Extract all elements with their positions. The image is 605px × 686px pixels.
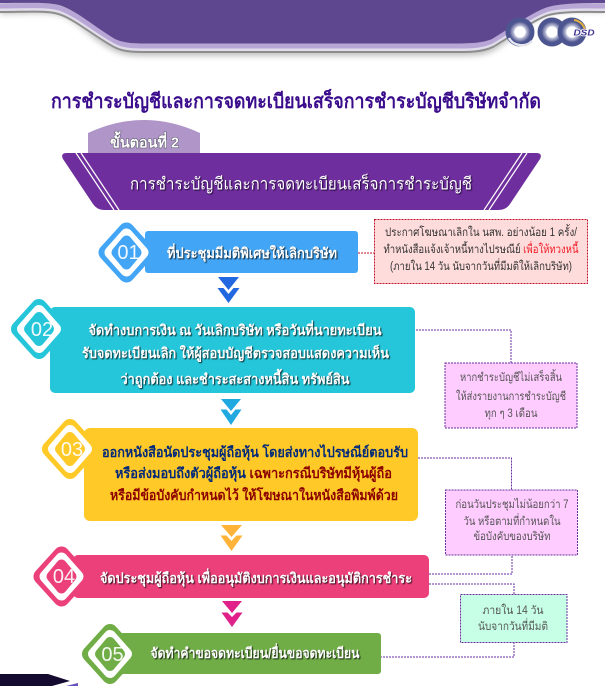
step 5 badge: 05	[101, 644, 124, 666]
banner: การชำระบัญชีและการจดทะเบียนเสร็จการชำระบัญชี	[130, 172, 472, 194]
banner	[62, 153, 541, 210]
note: pink box 2: ข้อบังคับของบริษัท	[474, 530, 550, 543]
logo	[506, 18, 595, 46]
footer corner shape	[0, 674, 78, 686]
step 3 badge: 03	[61, 439, 83, 461]
step 4 badge: 04	[53, 566, 75, 588]
header band	[0, 0, 605, 56]
step 1	[106, 230, 358, 274]
arrow 3	[220, 525, 242, 551]
step 2	[19, 307, 415, 393]
step 5 badge	[90, 632, 130, 676]
arrow 2	[220, 399, 242, 425]
note: pink box 1: หากชำระบัญชีไม่เสร็จสิ้น	[460, 369, 562, 384]
title: การชำระบัญชีและการจดทะเบียนเสร็จการชำระบัญชีบริษัทจำกัด	[51, 88, 541, 113]
step 3 text: หรือมีข้อบังคับกำหนดไว้ ให้โฆษณาในหนังสือพิมพ์ด้วย	[110, 486, 398, 503]
step 3 text: หรือส่งมอบถึงตัวผู้ถือหุ้น เฉพาะกรณีบริษัทมีหุ้นผู้ถือ	[115, 465, 392, 482]
step 2 bar	[50, 307, 415, 393]
note: pink box 2: วัน หรือตามที่กำหนดใน	[464, 513, 561, 528]
step 1 badge	[106, 230, 146, 274]
step 2 text	[82, 320, 389, 388]
note: green box: นับจากวันที่มีมติ	[478, 618, 548, 633]
tab: step 2	[88, 120, 200, 154]
step 2 badge: 02	[31, 319, 53, 341]
note: pink box 1	[445, 363, 577, 428]
step 2 text: ว่าถูกต้อง และชำระสะสางหนี้สิน ทรัพย์สิน	[120, 368, 350, 388]
note: red box	[374, 220, 588, 284]
note: red box: ประกาศโฆษณาเลิกใน นสพ. อย่างน้อย 1 ครั้ง/	[385, 224, 578, 239]
step 5 bar	[120, 633, 381, 674]
note: red box: ทำหนังสือแจ้งเจ้าหนี้ทางไปรษณีย์ เพื่อให้ทวงหนี้	[384, 241, 579, 256]
step 1 bar	[145, 231, 358, 273]
step 4 text: จัดประชุมผู้ถือหุ้น เพื่ออนุมัติงบการเงินและอนุมัติการชำระ	[100, 568, 412, 587]
step 4 badge	[42, 554, 82, 598]
arrow 4	[222, 601, 242, 627]
note: pink box 2: ก่อนวันประชุมไม่น้อยกว่า 7	[456, 498, 568, 511]
step 4 bar	[73, 555, 429, 598]
step 5 text: จัดทำคำขอจดทะเบียน/ยื่นขอจดทะเบียน	[150, 643, 360, 661]
connector lines	[358, 253, 514, 657]
step 5	[90, 632, 381, 676]
step 2 text: รับจดทะเบียนเลิก ให้ผู้สอบบัญชีตรวจสอบแสดงความเห็น	[82, 344, 389, 362]
note: pink box 1: ทุก ๆ 3 เดือน	[484, 407, 538, 420]
step 3 text	[102, 443, 408, 503]
step 1 text: ที่ประชุมมีมติพิเศษให้เลิกบริษัท	[167, 243, 337, 262]
logo: DSD	[574, 28, 595, 38]
step 4	[42, 554, 429, 598]
step 3 badge	[50, 427, 90, 471]
arrow 1	[218, 277, 240, 303]
step 3	[50, 427, 418, 521]
note: red box: (ภายใน 14 วัน นับจากวันที่มีมติให้เลิกบริษัท)	[390, 258, 572, 273]
step 1 badge: 01	[117, 242, 140, 264]
step 3 text: ออกหนังสือนัดประชุมผู้ถือหุ้น โดยส่งทางไปรษณีย์ตอบรับ	[102, 443, 408, 461]
note: pink box 1: ให้ส่งรายงานการชำระบัญชี	[456, 390, 566, 403]
note: pink box 2	[446, 490, 578, 555]
note: green box	[460, 594, 567, 642]
step 2 badge	[19, 307, 59, 351]
tab: step 2: ขั้นตอนที่ 2	[110, 130, 179, 152]
step 3 bar	[84, 428, 418, 521]
note: green box: ภายใน 14 วัน	[482, 604, 544, 617]
step 2 text: จัดทำงบการเงิน ณ วันเลิกบริษัท หรือวันที่นายทะเบียน	[88, 320, 382, 338]
